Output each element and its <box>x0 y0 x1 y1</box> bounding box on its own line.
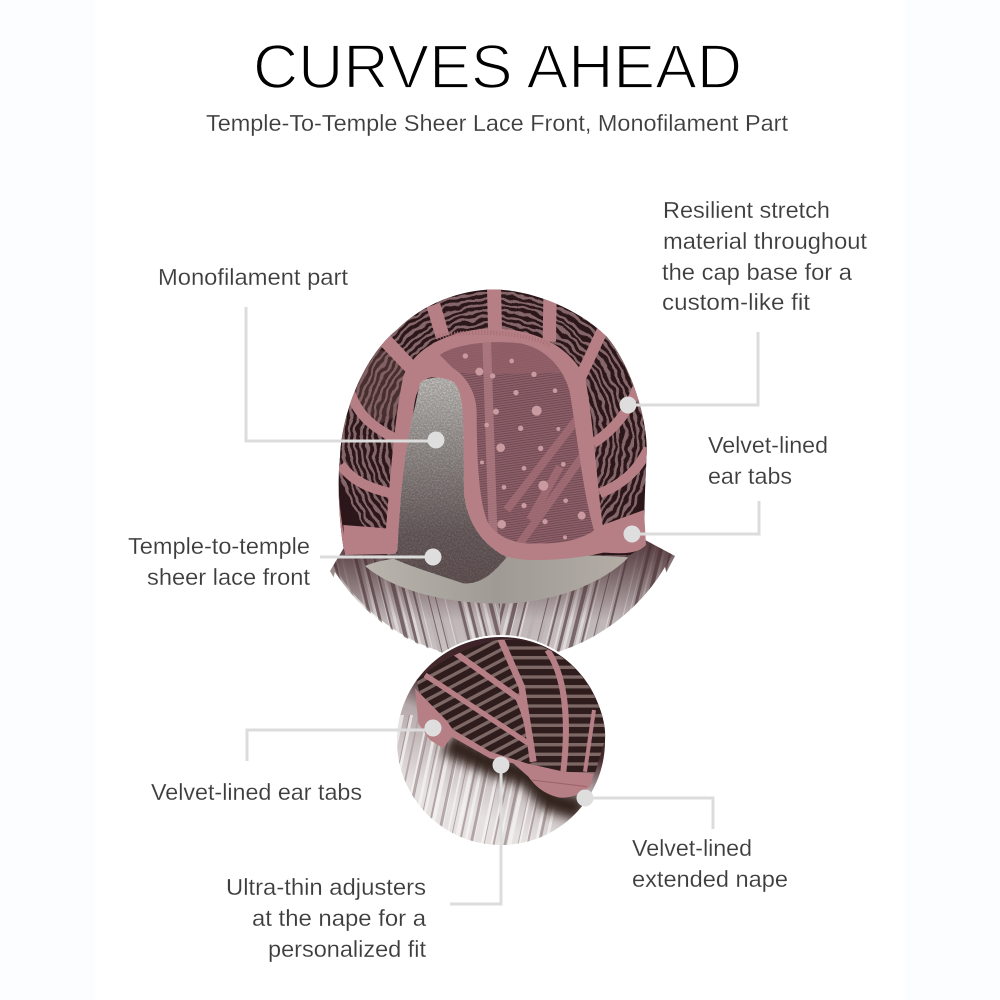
callout: velvet-lined ear tabs, side view <box>151 720 442 805</box>
callout: velvet-lined ear tabs, side view: Velvet-lined ear tabs <box>151 779 362 805</box>
cap spoke bands <box>336 288 648 553</box>
image: main cap interior <box>333 281 653 603</box>
title: CURVES AHEAD <box>253 32 742 102</box>
callout: resilient stretch material <box>620 197 867 414</box>
callout: velvet-lined ear tabs, front view: Velvet-lined <box>708 432 828 458</box>
side view bands <box>425 639 594 772</box>
side view shadow under cap <box>447 743 583 810</box>
white ring around side view <box>395 635 607 847</box>
image: small side cap <box>397 635 606 845</box>
callout: resilient stretch material: custom-like fit <box>662 289 810 315</box>
image: main cap hair fringe <box>330 540 675 653</box>
side view strap and ear tab <box>415 688 594 798</box>
callout: ultra-thin adjusters: at the nape for a <box>252 905 427 931</box>
side view wefts <box>416 640 606 774</box>
callout: velvet-lined extended nape: extended nape <box>632 866 788 892</box>
callout: sheer lace front: Temple-to-temple <box>128 533 310 559</box>
callout: ultra-thin adjusters <box>226 756 510 962</box>
callout: ultra-thin adjusters: personalized fit <box>268 936 426 962</box>
lace front band <box>365 555 628 603</box>
callout: monofilament part: Monofilament part <box>158 264 348 290</box>
callout: velvet-lined ear tabs, front view <box>624 432 828 542</box>
pink frame <box>343 328 646 560</box>
lace mesh panel <box>440 342 594 544</box>
cap wefts <box>338 289 647 555</box>
frame stitching edge <box>437 333 550 345</box>
callout: sheer lace front: sheer lace front <box>147 564 310 590</box>
callout: resilient stretch material: material throughout <box>663 228 867 254</box>
image: main cap hair edge mask <box>300 567 700 700</box>
callout: resilient stretch material: the cap base for a <box>662 259 853 285</box>
callout: velvet-lined ear tabs, front view: ear tabs <box>708 463 792 489</box>
subtitle: Temple-To-Temple Sheer Lace Front, Monofilament Part <box>206 110 788 136</box>
side view hair <box>395 635 610 850</box>
callout: monofilament part <box>158 264 444 448</box>
callout: ultra-thin adjusters: Ultra-thin adjusters <box>226 874 426 900</box>
callout: velvet-lined extended nape: Velvet-lined <box>632 835 752 861</box>
callout: resilient stretch material: Resilient stretch <box>663 197 830 223</box>
callout: sheer lace front <box>128 533 442 590</box>
monofilament panel <box>387 378 507 583</box>
callout: velvet-lined extended nape <box>576 790 788 892</box>
